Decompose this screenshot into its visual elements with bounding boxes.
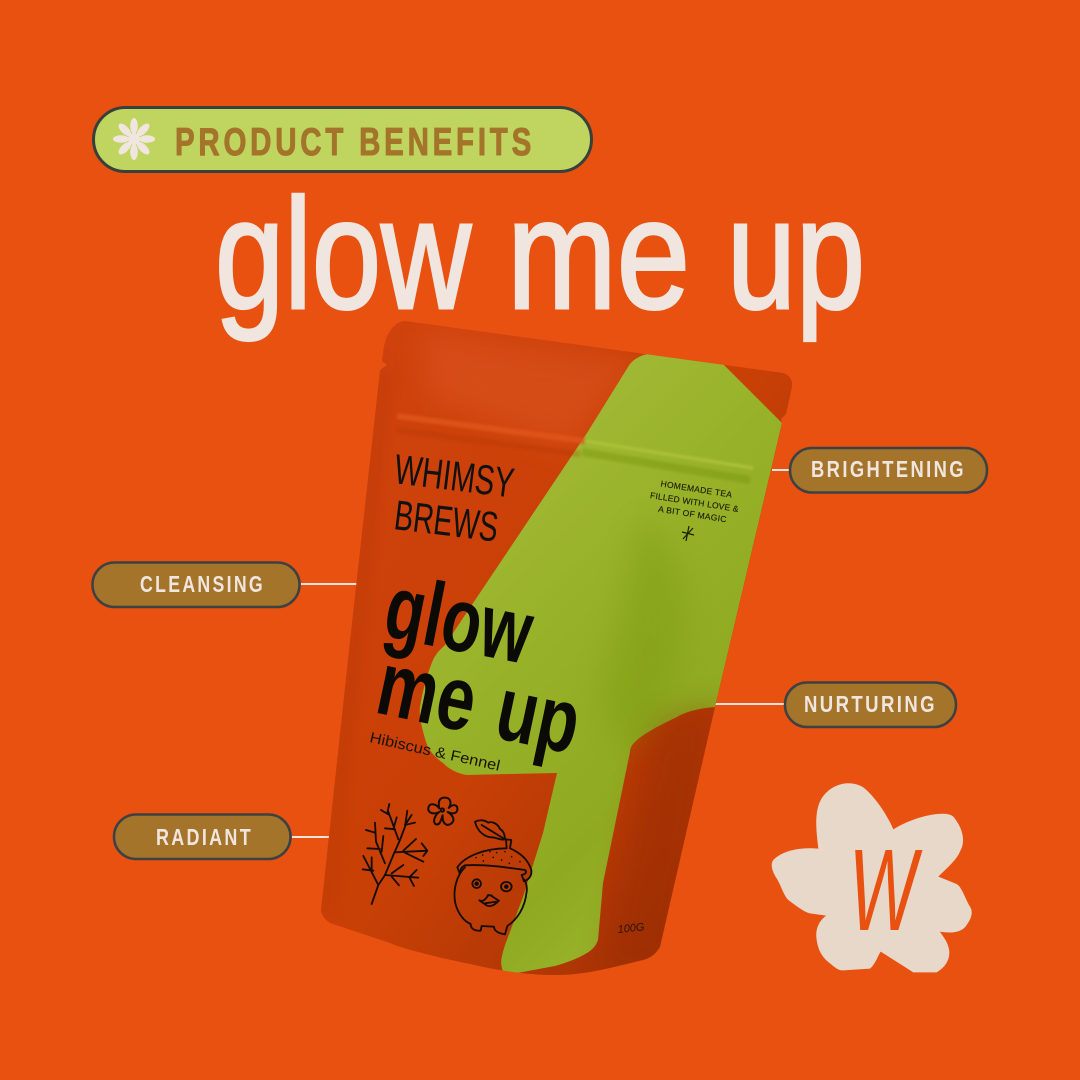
logo letter: W <box>849 827 923 955</box>
label: radiant <box>114 814 290 859</box>
icon: flower <box>428 798 457 825</box>
pouch tagline: A BIT OF MAGIC <box>657 504 727 524</box>
pouch product title <box>369 556 589 774</box>
label: radiant: RADIANT <box>156 824 253 850</box>
product pouch <box>310 315 800 985</box>
badge: product benefits <box>94 108 592 172</box>
pouch brand name: WHIMSY <box>392 445 517 507</box>
badge text: PRODUCT BENEFITS <box>175 121 535 164</box>
pouch body <box>310 315 800 985</box>
logo: flower badge <box>772 783 972 972</box>
pouch flavour: Hibiscus & Fennel <box>368 729 502 775</box>
connector lines <box>292 470 790 837</box>
title: glow <box>215 167 471 342</box>
label: cleansing <box>92 562 300 607</box>
icon: acorn character <box>455 820 531 934</box>
leaf <box>475 820 505 840</box>
title: me <box>507 167 690 342</box>
icon: daisy <box>113 118 155 160</box>
title <box>215 167 865 342</box>
pouch brand name: BREWS <box>392 491 501 551</box>
body <box>455 867 527 934</box>
pouch tagline <box>649 478 740 524</box>
label: brightening <box>790 448 987 492</box>
cap dots <box>476 852 520 863</box>
cap <box>457 839 531 881</box>
pouch weight: 100G <box>617 921 646 936</box>
pouch product title: glow <box>377 556 541 684</box>
pouch shading <box>600 700 720 980</box>
label: nurturing: NURTURING <box>804 691 937 717</box>
green wrap panel <box>420 354 782 973</box>
pouch tagline: HOMEMADE TEA <box>660 478 733 500</box>
label: brightening: BRIGHTENING <box>811 456 966 482</box>
pouch brand name <box>392 445 517 551</box>
pouch product title: up <box>488 658 589 774</box>
label: cleansing: CLEANSING <box>140 571 265 597</box>
face <box>472 879 481 888</box>
title: up <box>727 167 865 342</box>
icon: asterisk <box>682 526 694 541</box>
pouch product title: me <box>369 633 486 752</box>
zipper seal <box>397 416 753 480</box>
pouch tagline: FILLED WITH LOVE & <box>649 490 740 514</box>
label: nurturing <box>785 682 956 727</box>
icon: fennel sprig <box>363 804 427 904</box>
